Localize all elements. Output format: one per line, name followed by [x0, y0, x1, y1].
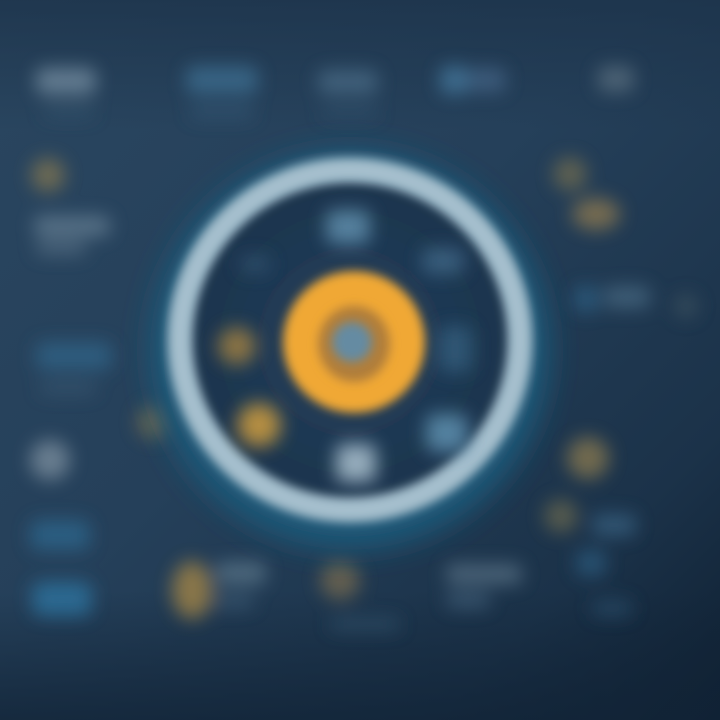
top row of blurred labels — [36, 66, 634, 118]
right column of blurred items — [544, 157, 698, 616]
circular gauge — [174, 170, 526, 526]
orange donut — [283, 271, 425, 413]
left column of blurred items — [30, 158, 171, 616]
inner icons — [218, 210, 472, 482]
bottom row of blurred items — [172, 560, 522, 630]
outer ring — [180, 170, 520, 510]
inner disc — [185, 177, 515, 507]
ring glow — [174, 174, 526, 526]
